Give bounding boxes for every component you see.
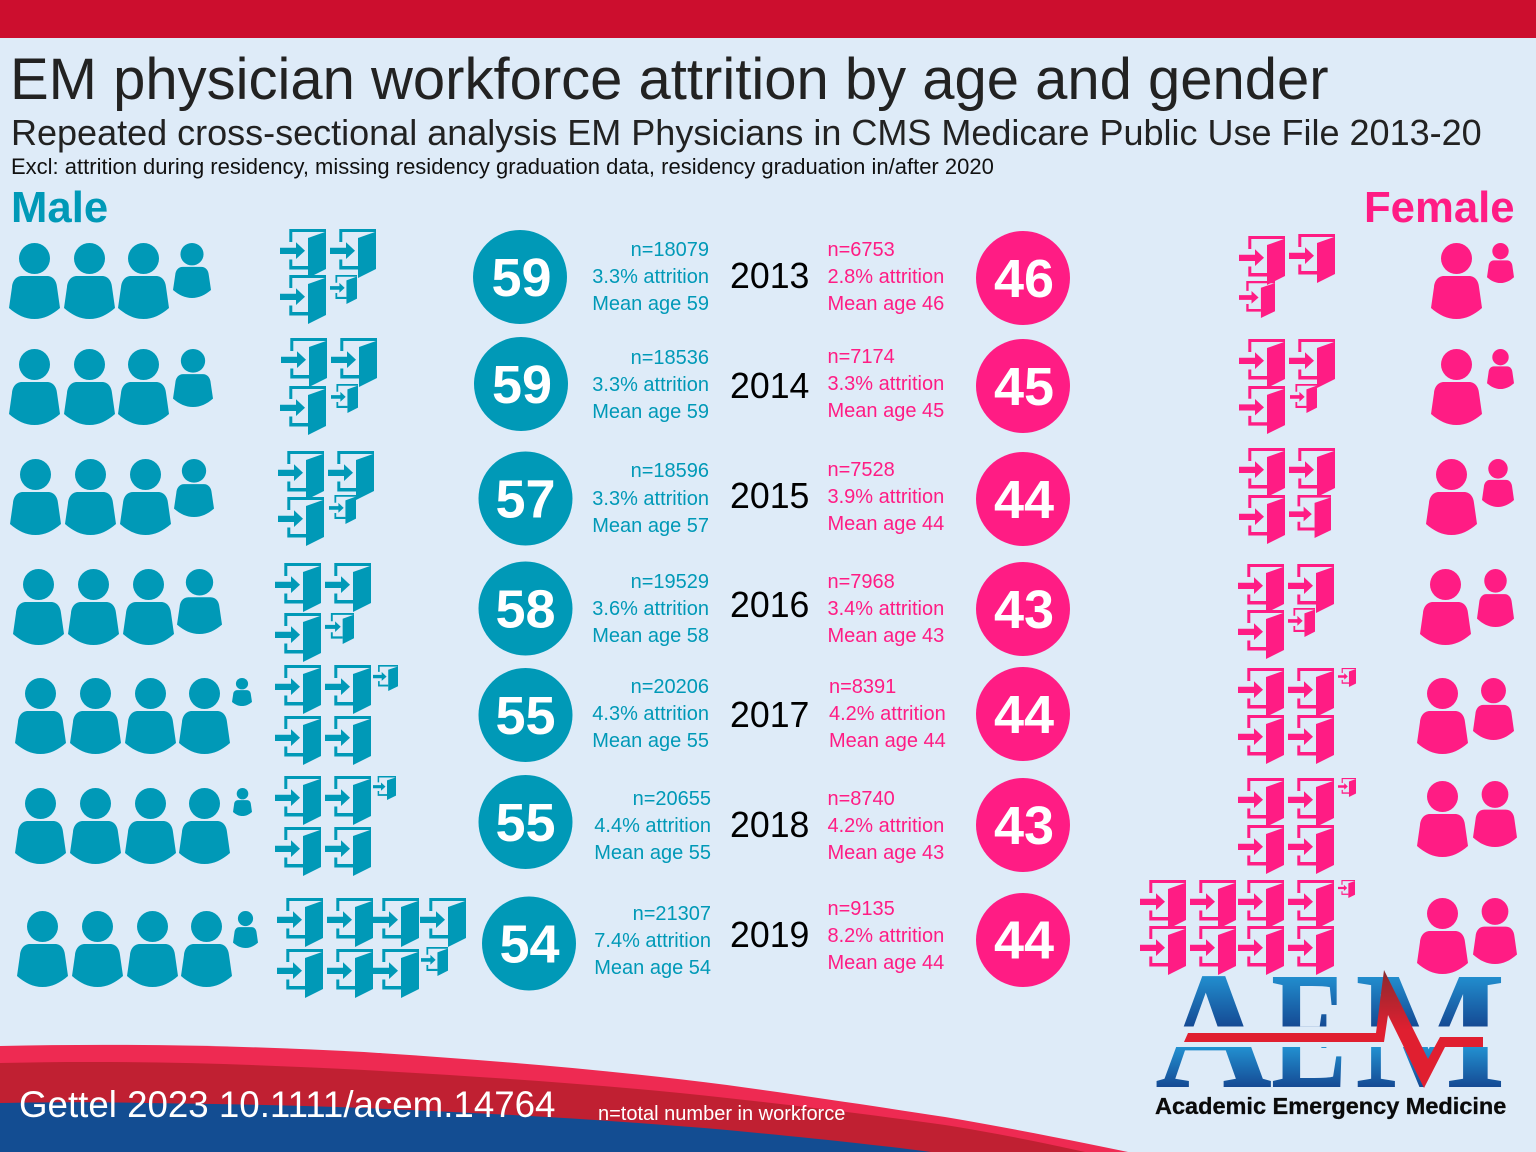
female mean age circle: [976, 339, 1070, 433]
female stats: [828, 239, 944, 315]
logo: Academic Emergency Medicine: [1155, 937, 1506, 1124]
female exit door icons: [1239, 339, 1335, 434]
male exit door icons: [280, 338, 377, 435]
year: 2019: [730, 915, 809, 955]
female stats: Mean age 44: [828, 952, 944, 974]
female exit door icons: [1239, 234, 1335, 318]
male exit door icons: [278, 451, 374, 546]
female people icons: [1417, 898, 1517, 974]
male mean age circle: 59: [491, 248, 552, 308]
footnote: n=total number in workforce: [598, 1103, 845, 1125]
male people icons: [9, 243, 211, 319]
female mean age circle: 46: [994, 249, 1054, 309]
year: 2018: [730, 805, 809, 845]
female mean age circle: 45: [994, 357, 1054, 417]
row 2014: [9, 337, 1514, 435]
male mean age circle: 57: [495, 470, 556, 530]
male stats: 3.3% attrition: [592, 488, 709, 510]
male mean age circle: [482, 896, 576, 990]
male stats: [594, 903, 711, 979]
female stats: n=8391: [829, 676, 896, 698]
male stats: 4.4% attrition: [594, 815, 711, 837]
row 2018: [15, 775, 1517, 876]
male stats: n=18536: [631, 347, 709, 369]
male stats: Mean age 59: [592, 401, 709, 423]
female stats: 2.8% attrition: [828, 266, 944, 288]
row 2019: [17, 880, 1517, 998]
female stats: Mean age 44: [829, 730, 946, 752]
male mean age circle: 54: [499, 914, 560, 974]
row 2013: [9, 229, 1514, 325]
female mean age circle: [976, 452, 1070, 546]
male mean age circle: 55: [495, 686, 556, 746]
female exit door icons: [1239, 448, 1335, 544]
male exit door icons: [275, 776, 396, 876]
subtitle: Repeated cross-sectional analysis EM Physicians in CMS Medicare Public Use File 2013-20: [11, 112, 1482, 153]
male stats: 3.3% attrition: [592, 266, 709, 288]
female exit door icons: [1238, 668, 1356, 764]
logo letters: M: [1355, 938, 1506, 1124]
male stats: [592, 676, 709, 752]
female exit door icons: [1238, 778, 1356, 874]
logo letters: E: [1271, 938, 1347, 1124]
male stats: Mean age 58: [592, 625, 709, 647]
female people icons: [1420, 569, 1514, 645]
male stats: n=21307: [633, 903, 711, 925]
logo letters: A: [1155, 937, 1272, 1124]
female stats: n=8740: [828, 788, 895, 810]
female people icons: [1417, 781, 1517, 857]
year: 2016: [730, 585, 809, 625]
logo heartbeat line: [1184, 970, 1483, 1088]
female people icons: [1431, 243, 1514, 319]
female stats: n=7528: [828, 459, 895, 481]
row 2016: [13, 562, 1514, 662]
footer swoosh: [0, 1045, 1128, 1152]
female stats: 4.2% attrition: [828, 815, 944, 837]
male stats: [592, 571, 709, 647]
female exit door icons: [1238, 564, 1334, 659]
male exit door icons: [280, 229, 376, 324]
female stats: Mean age 45: [828, 400, 944, 422]
male mean age circle: 59: [492, 355, 552, 415]
female people icons: [1417, 678, 1514, 754]
male mean age circle: 55: [495, 793, 556, 853]
female stats: [828, 459, 944, 535]
title: EM physician workforce attrition by age and gender: [10, 47, 1329, 112]
heading: male: Male: [11, 183, 108, 232]
year: 2017: [730, 695, 809, 735]
male mean age circle: 58: [495, 580, 556, 640]
female mean age circle: 43: [994, 796, 1054, 856]
female stats: [828, 788, 944, 864]
row 2015: [10, 448, 1514, 546]
male people icons: [15, 788, 252, 864]
female stats: [828, 571, 944, 647]
male exit door icons: [275, 665, 398, 765]
male stats: 3.3% attrition: [592, 374, 709, 396]
female stats: Mean age 46: [828, 293, 944, 315]
female mean age circle: [976, 562, 1070, 656]
male stats: n=20655: [633, 788, 711, 810]
female stats: n=7174: [828, 346, 895, 368]
female stats: n=7968: [828, 571, 895, 593]
female stats: n=9135: [828, 898, 895, 920]
female mean age circle: 43: [994, 580, 1054, 640]
female mean age circle: 44: [994, 685, 1054, 745]
male mean age circle: [478, 775, 572, 869]
year: 2013: [730, 256, 809, 296]
female mean age circle: [976, 778, 1070, 872]
male stats: n=20206: [631, 676, 709, 698]
male mean age circle: [478, 452, 572, 546]
female stats: [829, 676, 946, 752]
female people icons: [1426, 459, 1514, 535]
male mean age circle: [478, 562, 572, 656]
female stats: [828, 346, 944, 422]
row 2017: [15, 665, 1514, 765]
male stats: n=18596: [631, 460, 709, 482]
female stats: 8.2% attrition: [828, 925, 944, 947]
female stats: Mean age 43: [828, 842, 944, 864]
heading: female: Female: [1364, 183, 1515, 232]
male stats: 3.6% attrition: [592, 598, 709, 620]
female people icons: [1431, 349, 1514, 425]
male stats: Mean age 59: [592, 293, 709, 315]
exclusions note: Excl: attrition during residency, missing residency graduation data, residency graduation in/after 2020: [11, 154, 994, 179]
logo wordmark: Academic Emergency Medicine: [1155, 1093, 1506, 1119]
male mean age circle: [478, 668, 572, 762]
male people icons: [15, 678, 252, 754]
female stats: n=6753: [828, 239, 895, 261]
female stats: 3.9% attrition: [828, 486, 944, 508]
male stats: [592, 460, 709, 537]
male stats: Mean age 54: [594, 957, 711, 979]
female mean age circle: 44: [994, 910, 1054, 970]
female stats: 3.3% attrition: [828, 373, 944, 395]
male stats: 7.4% attrition: [594, 930, 711, 952]
male stats: Mean age 57: [592, 515, 709, 537]
female mean age circle: [976, 231, 1070, 325]
male mean age circle: [473, 230, 567, 324]
female stats: Mean age 43: [828, 625, 944, 647]
female stats: 4.2% attrition: [829, 703, 946, 725]
male stats: Mean age 55: [592, 730, 709, 752]
female exit door icons: [1140, 880, 1355, 975]
male people icons: [10, 459, 214, 535]
female mean age circle: 44: [994, 470, 1054, 530]
female mean age circle: [976, 893, 1070, 987]
male stats: [592, 347, 709, 423]
female stats: [828, 898, 944, 974]
female stats: 3.4% attrition: [828, 598, 944, 620]
logo letters: [1155, 937, 1506, 1124]
year: 2015: [730, 476, 809, 516]
female stats: Mean age 44: [828, 513, 944, 535]
male mean age circle: [474, 337, 568, 431]
male people icons: [13, 569, 222, 645]
male stats: [594, 788, 711, 864]
male stats: n=18079: [631, 239, 709, 261]
male exit door icons: [275, 563, 371, 662]
year: 2014: [730, 366, 809, 406]
top red bar: [0, 0, 1536, 38]
male stats: Mean age 55: [594, 842, 711, 864]
male exit door icons: [277, 898, 466, 998]
citation: Gettel 2023 10.1111/acem.14764: [19, 1084, 555, 1125]
male stats: n=19529: [631, 571, 709, 593]
female mean age circle: [976, 667, 1070, 761]
male people icons: [17, 911, 258, 987]
male stats: 4.3% attrition: [592, 703, 709, 725]
male people icons: [9, 349, 213, 425]
male stats: [592, 239, 709, 315]
